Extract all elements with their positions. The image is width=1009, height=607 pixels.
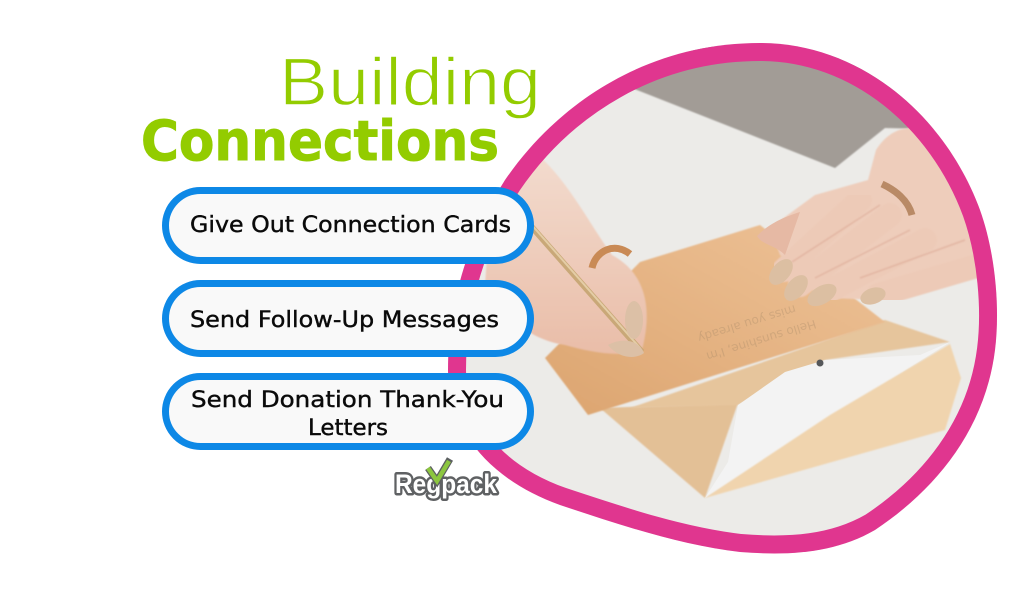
thumb xyxy=(757,212,800,255)
photo: resting hand xyxy=(757,128,990,311)
pill: Send Donation Thank-You Letters: Send Donation Thank-You xyxy=(191,388,504,413)
photo: envelope white lining xyxy=(705,342,950,498)
pill: Send Follow-Up Messages xyxy=(166,284,530,354)
ring xyxy=(882,184,912,215)
photo: writing hand xyxy=(485,150,647,357)
photo: table surface xyxy=(466,90,979,536)
photo: kraft letter sheet xyxy=(545,225,885,415)
title line: Building: Building xyxy=(279,44,541,120)
pill: Send Donation Thank-You Letters xyxy=(166,376,530,446)
photo: handwriting on letter: miss you already xyxy=(696,302,798,345)
nails xyxy=(769,259,793,285)
logo: Regpack xyxy=(395,459,498,499)
photo: envelope upper flap xyxy=(630,320,950,408)
photo: envelope lower flap xyxy=(600,403,738,498)
ring xyxy=(592,248,630,268)
photo: handwriting on letter xyxy=(699,305,816,358)
pill: Send Donation Thank-You Letters: Letters xyxy=(308,416,388,441)
pill: Give Out Connection Cards xyxy=(166,190,530,260)
photo: grey wall xyxy=(632,45,960,168)
logo check mark xyxy=(428,459,450,481)
photo: small grey dot xyxy=(816,360,824,366)
pen xyxy=(530,225,642,352)
pill: Send Follow-Up Messages: Send Follow-Up Messages xyxy=(190,308,499,333)
photo: handwriting on letter: Hello sunshine, I'm xyxy=(705,317,818,364)
panel: photo of hands writing a letter in a pink blob frame xyxy=(440,40,1005,560)
finger creases xyxy=(792,205,965,278)
photo: envelope open flap xyxy=(705,344,961,498)
title line: Connections: Connections xyxy=(141,109,499,173)
pink blob border xyxy=(448,43,997,553)
title xyxy=(141,44,541,173)
pill: Give Out Connection Cards: Give Out Connection Cards xyxy=(190,213,511,238)
thumb and finger xyxy=(608,341,644,357)
logo wordmark: Regpack xyxy=(395,469,498,499)
